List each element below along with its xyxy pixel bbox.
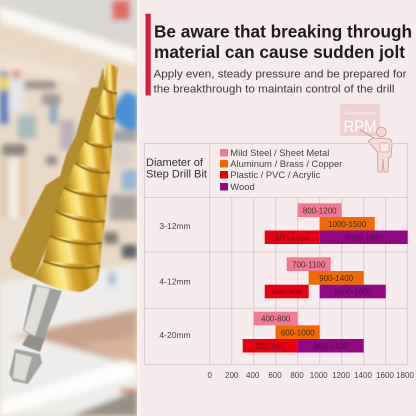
x axis labels: 1200 xyxy=(332,371,350,380)
subtitle xyxy=(154,68,407,96)
x axis labels: 800 xyxy=(290,371,304,380)
photo: step drill bit xyxy=(9,62,118,384)
bars: 4-12mm: 900-1400 xyxy=(319,274,354,283)
row labels xyxy=(159,221,191,340)
title: Be aware that breaking through xyxy=(154,22,412,42)
x axis labels: 200 xyxy=(225,371,239,380)
title xyxy=(154,22,412,62)
bars: 4-12mm xyxy=(265,257,386,298)
column heading: Step Drill Bit xyxy=(146,168,207,180)
x axis labels: 1800 xyxy=(396,371,414,380)
bars: 3-12mm: 1000-1500 xyxy=(328,220,367,229)
row labels: 3-12mm xyxy=(159,221,191,231)
x axis labels: 1000 xyxy=(310,371,328,380)
red accent bar xyxy=(146,14,151,96)
icon: presenter with recommend RPM sign xyxy=(340,104,392,172)
title: material can cause sudden jolt xyxy=(154,42,405,62)
bars: 4-20mm: 400-800 xyxy=(261,315,291,324)
legend: Mild Steel / Sheet Metal xyxy=(230,148,329,158)
bars: 3-12mm: 500-1000 xyxy=(275,234,310,242)
bars: 4-20mm xyxy=(243,312,364,352)
x axis labels: 1400 xyxy=(354,371,372,380)
subtitle: the breakthrough to maintain control of the drill xyxy=(154,84,394,96)
subtitle: Apply even, steady pressure and be prepared for xyxy=(154,68,407,80)
drill body: stepped gold bands xyxy=(34,62,118,292)
x axis labels: 0 xyxy=(207,371,212,380)
bars: 4-12mm: 500-900 xyxy=(272,288,302,297)
bars: 4-20mm: 800-1400 xyxy=(314,342,348,351)
legend xyxy=(220,148,342,192)
bars: 4-12mm: 700-1100 xyxy=(292,260,326,269)
x axis labels: 600 xyxy=(268,371,282,380)
bars: 3-12mm xyxy=(265,203,408,244)
bars: 3-12mm: 800-1200 xyxy=(303,206,337,215)
x axis labels: 400 xyxy=(246,371,260,380)
bars: 3-12mm: 1000-1800 xyxy=(345,234,383,242)
legend: Wood xyxy=(230,182,255,192)
icon: presenter with recommend RPM sign: Recommend xyxy=(345,111,375,117)
chart grid xyxy=(144,144,407,364)
chart: RPM range table xyxy=(144,144,414,380)
x axis labels xyxy=(207,371,414,380)
bars: 4-20mm: 600-1000 xyxy=(281,328,315,337)
x axis labels: 1600 xyxy=(376,371,394,380)
bars: 4-12mm: 1000-1600 xyxy=(334,288,372,297)
icon: presenter with recommend RPM sign: RPM xyxy=(344,118,376,136)
drill shank: hex shaft xyxy=(9,284,62,384)
legend: Aluminum / Brass / Copper xyxy=(230,159,342,169)
bars: 4-20mm: 300-800 xyxy=(256,342,285,351)
drill flute: textured side xyxy=(10,67,105,278)
row labels: 4-12mm xyxy=(159,277,191,287)
photo: blurred workshop background xyxy=(0,0,140,416)
column heading: Diameter of xyxy=(146,157,204,169)
legend: Plastic / PVC / Acrylic xyxy=(230,170,321,180)
column heading xyxy=(146,157,207,180)
row labels: 4-20mm xyxy=(159,330,191,340)
divider strip beside photo xyxy=(137,0,140,416)
